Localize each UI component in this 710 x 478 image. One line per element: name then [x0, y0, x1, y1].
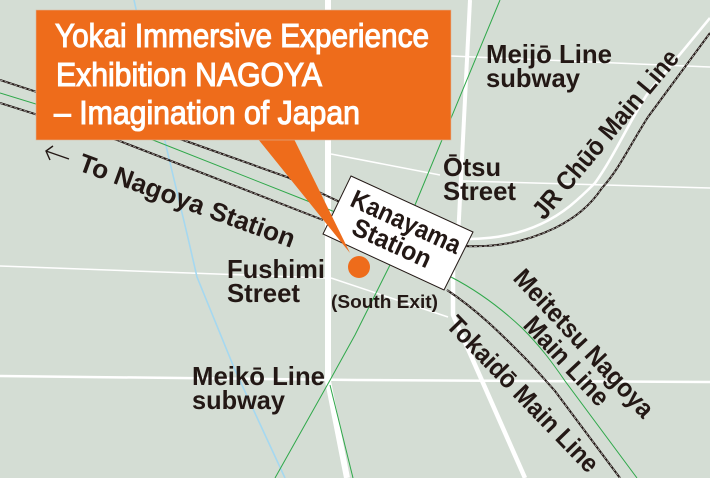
station box	[323, 176, 473, 290]
railway: JR Chuo Main Line	[464, 33, 710, 246]
label: Meijo Line subway: Meijō Line	[486, 39, 612, 69]
label: Main Line: Main Line	[518, 310, 616, 412]
label: Fushimi Street	[227, 254, 325, 308]
label: Otsu Street: Ōtsu	[443, 152, 501, 182]
label: Otsu Street	[443, 152, 516, 206]
railway: lower line and Tokaido Main Line	[0, 103, 620, 478]
label: to Nagoya Station: To Nagoya Station	[75, 147, 299, 254]
callout title	[54, 17, 429, 131]
label: Meijo Line subway: subway	[486, 63, 581, 93]
callout title: Exhibition NAGOYA	[56, 56, 322, 93]
label: Meiko Line subway: subway	[192, 385, 286, 415]
subway: Meiko Line (blue)	[134, 0, 285, 478]
railway: upper line	[0, 80, 342, 203]
label: Meiko Line subway: Meikō Line	[192, 361, 325, 391]
station label: Station	[348, 212, 437, 274]
label: Otsu Street: Street	[443, 176, 516, 206]
label: JR Chuo Main Line: JR Chūō Main Line	[526, 43, 685, 225]
location dot	[348, 256, 370, 278]
station label: Kanayama	[346, 184, 466, 260]
callout title: – Imagination of Japan	[54, 94, 360, 131]
label: Meijo Line subway	[486, 39, 612, 93]
label: Fushimi Street: Street	[227, 278, 300, 308]
label: Meitetsu Nagoya: Meitetsu Nagoya	[508, 263, 661, 424]
callout title: Yokai Immersive Experience	[55, 17, 429, 54]
arrow: to Nagoya	[46, 146, 69, 160]
label: south exit: (South Exit)	[331, 291, 438, 312]
callout	[36, 10, 451, 253]
label: Meiko Line subway	[192, 361, 325, 415]
label: Fushimi Street: Fushimi	[227, 254, 325, 284]
